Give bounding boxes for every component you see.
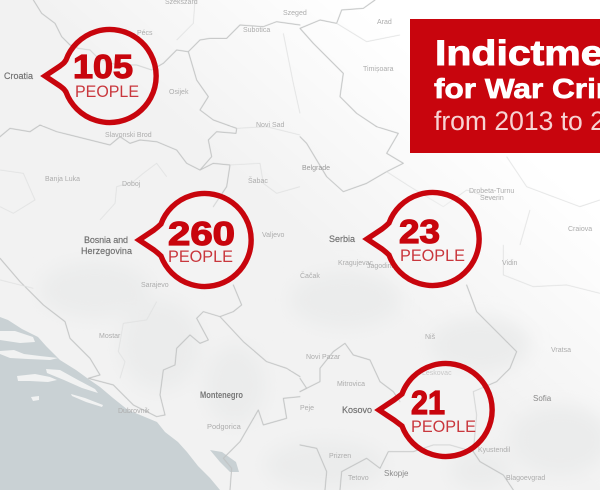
city labels: Vidin [502,260,518,267]
city labels: Arad [377,19,392,26]
sea [0,317,220,490]
callout: Croatia 105 people [45,29,156,123]
city labels: Banja Luka [45,176,80,183]
city labels: Kragujevac [338,260,374,267]
city labels: Belgrade [302,165,330,172]
city labels: Novi Pazar [306,354,341,361]
city labels: Drobeta-Turnu [469,188,514,195]
country labels: Serbia [329,234,355,244]
city labels: Mitrovica [337,381,365,388]
country labels: Croatia [4,71,33,81]
city labels: Slavonski Brod [105,132,152,139]
country labels: Herzegovina [81,246,132,256]
city labels: Niš [425,334,436,341]
city labels: Podgorica [207,422,242,431]
city labels: Peje [300,405,314,412]
city labels: Blagoevgrad [506,475,545,482]
callout: Bosnia and Herzegovina 260 people: 260 [168,215,235,252]
city labels: Sofia [533,394,552,403]
city labels: Jagodina [367,263,396,270]
country labels: Bosnia and [84,235,128,245]
city labels: Osijek [169,89,189,96]
callout: Serbia 23 people [367,192,479,286]
callout: Kosovo 21 people: 21 [411,384,445,421]
city labels: Leskovac [422,370,452,377]
city labels: Čačak [300,271,320,280]
city labels: Novi Sad [256,122,285,129]
callout: Serbia 23 people: PEOPLE [400,247,465,265]
callout: Croatia 105 people: PEOPLE [75,83,139,101]
country labels: Montenegro [200,390,243,400]
callout: Kosovo 21 people [379,363,492,456]
callout: Bosnia and Herzegovina 260 people [139,193,251,286]
islands [0,331,103,407]
city labels: Šabac [248,176,268,185]
city labels: Craiova [568,226,592,233]
city labels: Szeged [283,10,307,17]
callout: Croatia 105 people: 105 [73,48,133,85]
city labels: Subotica [243,27,270,34]
city labels: Sarajevo [141,282,169,289]
terrain shading [40,262,600,490]
city labels: Kyustendil [478,447,511,454]
city labels: Skopje [384,469,409,478]
city labels: Tetovo [348,475,369,482]
callout: Bosnia and Herzegovina 260 people: PEOPLE [168,248,233,266]
city labels: Doboj [122,181,141,188]
city labels: Severin [480,195,504,202]
city labels: Vratsa [551,347,571,354]
city labels: Prizren [329,453,351,460]
callout: Serbia 23 people: 23 [399,213,440,250]
city labels: Valjevo [262,232,285,239]
callout: Kosovo 21 people: PEOPLE [411,418,476,436]
title panel [410,19,600,153]
city labels: Timișoara [363,66,394,73]
country labels: Kosovo [342,405,372,415]
city labels: Mostar [99,333,121,340]
lake [210,450,239,472]
country labels [4,71,372,415]
city labels: Dubrovnik [118,408,150,415]
city labels: Pécs [137,30,153,37]
